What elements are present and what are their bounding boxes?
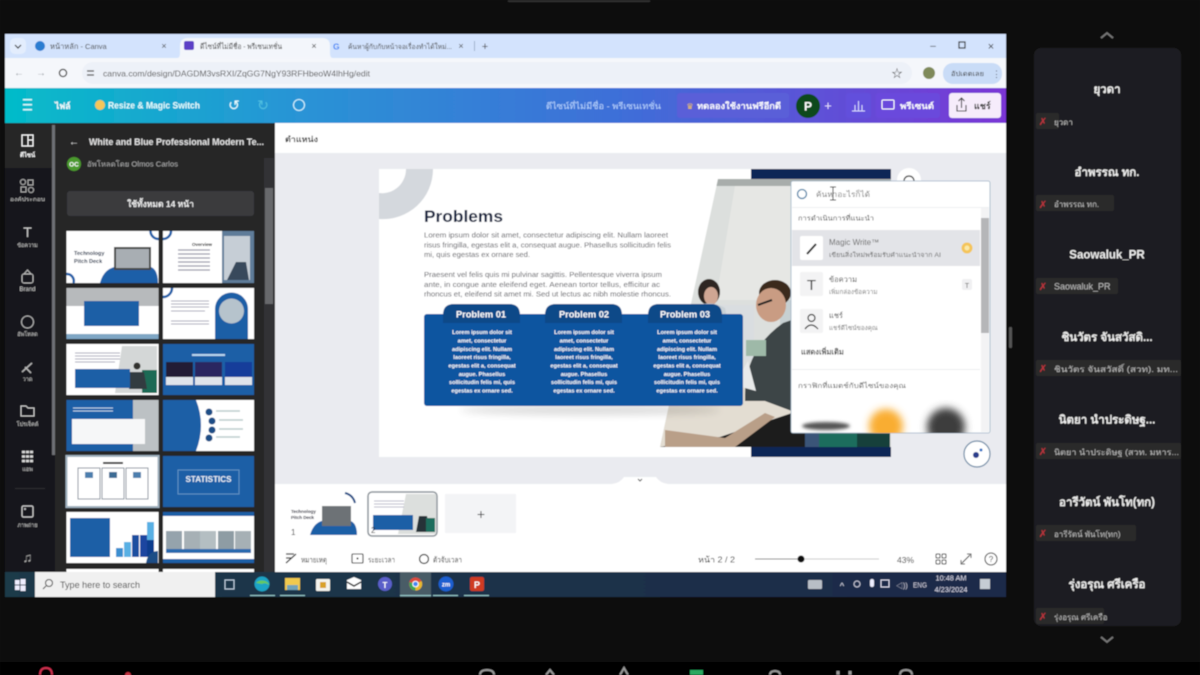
thumb 11 statistics chart (66, 512, 158, 563)
use all pages button: ใช้ทั้งหมด 14 หน้า (127, 197, 194, 209)
author row: อัพโหลดโดย Olmos Carlos (87, 160, 179, 168)
rail item: apps (22, 452, 33, 473)
browser window (5, 34, 1006, 597)
rail item: text: T (23, 224, 32, 240)
view controls (936, 553, 997, 565)
participant 7 (1036, 578, 1146, 624)
page filmstrip (275, 484, 1006, 548)
problem 02 (545, 304, 622, 394)
canva header bar: ดีไซน์ที่ไม่มีชื่อ - พรีเซนเทชั่น (546, 100, 661, 111)
thumb 1 technology pitch deck (66, 231, 158, 283)
rail item: design (20, 135, 36, 159)
rail item: elements: องค์ประกอบ (10, 196, 45, 203)
problem 02: sollicitudin felis mi, quis (551, 380, 617, 386)
blue problems card (424, 304, 743, 406)
woman in background (698, 279, 720, 305)
timer (420, 554, 462, 564)
rail item: music: ♫ (23, 550, 32, 565)
participant list up chevron (1101, 33, 1113, 38)
participant 2: ✗ (1039, 200, 1047, 211)
row: magic write: Magic Write™ (829, 238, 879, 247)
section label: suggested: การดำเนินการที่แนะนำ (798, 214, 874, 222)
body paragraphs: mi, quis egestas ex ornare sed. (424, 250, 530, 259)
browser tab strip: + (482, 41, 488, 53)
rail item: brand (19, 270, 36, 293)
taskbar app icons: T (383, 581, 388, 590)
browser address bar: canva.com/design/DAGDM3vsRXI/ZqGG7NgY93RFHbeoW4lhHg/edit (103, 68, 371, 78)
rail item: uploads (17, 316, 38, 338)
canvas toolbar (275, 123, 1006, 153)
search field: ค้นหาอะไรก็ได้ (816, 189, 870, 199)
rail item: photos: ภาพถ่าย (18, 523, 37, 529)
body paragraphs: Praesent vel felis quis mi pulvinar sagittis. Pellentesque viverra ipsum (424, 270, 662, 279)
canva header bar: + (824, 98, 832, 113)
problem 03: Problem 03 (660, 310, 710, 320)
refresh button behind popup (897, 168, 921, 192)
browser tab strip: × (988, 41, 994, 53)
thumb 3 introduction (66, 288, 158, 339)
participant list down chevron (1101, 637, 1113, 642)
problem 03: augue. Phasellus (664, 372, 710, 378)
notes (286, 554, 327, 564)
participant 1 (1036, 84, 1121, 129)
participant 7: ✗ (1039, 612, 1047, 623)
canvas toolbar: ตำแหน่ง (285, 135, 318, 144)
magic assistant button (964, 441, 990, 467)
body paragraphs: Lorem ipsum dolor sit amet, consectetur adipiscing elit. Nullam laoreet (424, 230, 669, 240)
problem 02: amet, consectetur (560, 338, 609, 344)
taskbar app icons: zm (442, 582, 450, 588)
participant 7: รุ่งอรุณ ศรีเครือ (1069, 578, 1146, 592)
duration (352, 554, 395, 564)
author row: OC (69, 162, 79, 168)
problem 01: augue. Phasellus (459, 372, 505, 378)
rail item: elements (10, 179, 45, 203)
problem 03: egestas ex ornare sed. (656, 388, 718, 394)
notification icon (980, 579, 990, 589)
heading: Problems (424, 207, 503, 226)
panel scrollbar (264, 158, 274, 572)
browser address bar: ⋮ (992, 69, 1001, 79)
top window notch (508, 0, 650, 2)
thumb 12 our team (163, 512, 254, 563)
participant 1: ยุวดา (1093, 84, 1121, 97)
clock (934, 576, 968, 594)
page counter: หน้า 2 / 2 (698, 556, 736, 564)
participant 6: อารีรัตน์ พันโท(ทก) (1054, 529, 1121, 539)
thumb 10 statistics (163, 456, 254, 507)
row: text: T (965, 283, 970, 290)
participant 6 (1036, 494, 1155, 541)
search box: Type here to search (60, 580, 140, 591)
bottom status bar (275, 548, 1006, 572)
canva header bar: ↺ (228, 97, 240, 113)
canva header bar: ♛ (686, 102, 694, 111)
row: share (800, 309, 878, 333)
template thumbnails (66, 231, 254, 574)
canva header bar: ทดลองใช้งานฟรีอีกดี (697, 101, 782, 111)
clock: 4/23/2024 (934, 587, 968, 594)
participant panel (1034, 48, 1181, 626)
add page button (445, 494, 516, 533)
rail item: design: ดีไซน์ (20, 151, 36, 159)
page thumb 1: Technology (291, 509, 316, 514)
participant 6: ✗ (1039, 529, 1047, 540)
problem 01 (443, 304, 520, 394)
problem 02: augue. Phasellus (561, 372, 607, 378)
search box (35, 572, 215, 597)
problem 02: Problem 02 (559, 310, 609, 320)
body paragraphs: risus fringilla, egestas elit a, consequat augue. Phasellus sollicitudin felis (424, 240, 671, 250)
problem 01: amet, consectetur (458, 338, 507, 344)
browser tab strip: หน้าหลัก - Canva (50, 42, 108, 51)
thumb 2 overview: Overview (192, 242, 212, 247)
problem 01: adipiscing elit. Nullam (452, 347, 512, 353)
participant 5: นิตยา นำประดิษฐ... (1059, 412, 1155, 428)
participant 1: ✗ (1039, 117, 1047, 128)
problem 03: amet, consectetur (663, 338, 712, 344)
participant 4: ✗ (1039, 364, 1047, 375)
rail item: apps: แอพ (22, 467, 33, 473)
problem 03: egestas elit a, consequat (653, 364, 721, 370)
page thumb 1 (287, 493, 357, 537)
slide page (379, 169, 751, 457)
problem 03: sollicitudin felis mi, quis (654, 380, 720, 386)
thumb 1 technology pitch deck: Pitch Deck (74, 259, 103, 265)
rail item: draw: วาด (23, 377, 33, 383)
browser address bar (5, 58, 1006, 88)
template side panel: White and Blue Professional Modern Te... (89, 137, 264, 147)
page thumb 1: 1 (291, 528, 296, 537)
popup scrollbar (981, 208, 989, 432)
thumb 10 statistics: STATISTICS (186, 475, 232, 484)
problem 03: adipiscing elit. Nullam (657, 347, 717, 353)
rail item: projects: โปรเจ็คต์ (17, 420, 39, 428)
browser address bar: อัปเดตเลย (951, 70, 984, 78)
canva header bar: แชร์ (974, 100, 991, 111)
canva header bar: ↻ (257, 97, 269, 113)
browser tab strip: × (161, 41, 167, 51)
notes: หมายเหตุ (301, 556, 327, 564)
canva header bar: ไฟล์ (54, 101, 71, 111)
thumb 4 about us (163, 288, 254, 339)
participant 3: Saowaluk_PR (1054, 282, 1111, 292)
browser address bar: → (36, 68, 46, 79)
rail item: text (17, 224, 38, 249)
thumb row cut off (66, 569, 254, 574)
row: share: แชร์ (829, 311, 843, 320)
man at laptop (759, 280, 791, 306)
browser tab strip: × (458, 41, 464, 51)
participant 4: ชินวัตร จันสวัสดิ์ (สวท). มท... (1054, 363, 1178, 374)
body paragraphs: ante, in congue ante eleifend eget. Aenean tortor tellus, efficitur ac (424, 280, 660, 289)
thumb 2 overview (163, 231, 254, 283)
browser tab strip (5, 34, 1006, 58)
participant 7: รุ่งอรุณ ศรีเครือ (1054, 613, 1108, 622)
search popup (791, 181, 990, 446)
panel collapse handle (275, 315, 283, 367)
problem 01: Problem 01 (456, 310, 506, 320)
participant 5: ✗ (1039, 447, 1047, 458)
view controls: ? (989, 555, 994, 564)
browser tab strip: ดีไซน์ที่ไม่มีชื่อ - พรีเซนเทชั่น (200, 41, 282, 51)
participant 2: อำพรรณ ทก. (1075, 165, 1139, 179)
thumb 9 our services selected (66, 456, 158, 507)
problem 02: laoreet risus fringilla, (555, 355, 613, 361)
workspace collapse notch (612, 477, 668, 484)
problem 01: egestas ex ornare sed. (451, 388, 513, 394)
window resize handle (1009, 327, 1012, 348)
thumb 5 problems (66, 344, 158, 395)
problem 01: egestas elit a, consequat (448, 364, 516, 370)
problem 02: adipiscing elit. Nullam (554, 347, 614, 353)
thumb 1 technology pitch deck: Technology (74, 251, 105, 257)
problem 01: Lorem ipsum dolor sit (452, 330, 512, 336)
timer: ตัวจับเวลา (433, 556, 462, 564)
use all pages button (67, 191, 254, 216)
row: text: T (807, 277, 816, 294)
rail item: uploads: อัพโหลด (17, 330, 38, 338)
browser tab strip: × (311, 41, 317, 51)
participant 3: Saowaluk_PR (1069, 250, 1145, 262)
slide navy backdrop (751, 169, 891, 457)
problem 03: laoreet risus fringilla, (658, 355, 716, 361)
photo: office meeting (655, 179, 895, 447)
taskbar app icons: P (474, 580, 480, 590)
rail scrollbar (52, 125, 55, 455)
page thumb 2 selected (368, 492, 437, 536)
thumb 6 concept in business (163, 344, 254, 395)
participant 5: นิตยา นำประดิษฐ (สวท. มหาร... (1054, 448, 1179, 457)
participant 1: ยุวดา (1054, 118, 1073, 127)
panel heading: ← (69, 137, 79, 148)
windows taskbar (5, 572, 1006, 597)
participant 3: ✗ (1039, 282, 1047, 293)
row: share: แชร์ดีไซน์ของคุณ (829, 324, 878, 332)
author row (67, 157, 179, 171)
clock: 10:48 AM (936, 576, 967, 582)
browser tab strip: – (930, 41, 936, 52)
canva header bar: พรีเซนต์ (900, 101, 935, 111)
left icon rail (5, 123, 55, 572)
show more: แสดงเพิ่มเติม (801, 346, 844, 356)
page thumb 2 selected: 2 (371, 526, 376, 535)
participant 4: ชินวัตร จันสวัสดิ... (1061, 331, 1153, 344)
rail item: projects (17, 406, 39, 428)
add page button: + (477, 506, 485, 522)
active tab (177, 38, 333, 58)
problem 03: Lorem ipsum dolor sit (657, 330, 717, 336)
browser tab strip: ค้นหาผู้กับกับหน้าจอเรื่องทำได้ใหม่... (348, 42, 452, 51)
rail item: text: ข้อความ (17, 242, 38, 249)
decorative ring (379, 169, 433, 219)
workspace (275, 153, 1006, 484)
row: magic write: เขียนสิ่งใหม่พร้อมรับคำแนะนำจาก AI (829, 250, 941, 259)
row: text (800, 272, 972, 296)
rail item: draw (22, 363, 33, 383)
problem 01: laoreet risus fringilla, (453, 355, 511, 361)
slide: problems (379, 169, 895, 457)
template side panel (55, 123, 283, 574)
participant 6: อารีวัตน์ พันโท(ทก) (1059, 494, 1155, 509)
zoom percent: 43% (897, 555, 914, 565)
system tray (808, 579, 927, 591)
system tray: ◁)) (896, 582, 908, 590)
canva header bar: Resize & Magic Switch (108, 100, 200, 110)
row: text: ข้อความ (829, 275, 857, 284)
search field (792, 187, 989, 208)
participant 2: อำพรรณ ทก. (1054, 200, 1099, 209)
page thumb 1: Pitch Deck (291, 515, 315, 520)
zoom slider (755, 556, 879, 562)
graphic previews (800, 402, 972, 434)
body paragraphs: rhoncus et, eleifend sit amet mi. Sed ut lectus ac nibh molestie rhoncus. (424, 290, 671, 298)
participant 5 (1036, 412, 1181, 459)
participant 2 (1036, 165, 1139, 211)
system tray: ENG (913, 582, 927, 590)
participant 4 (1036, 331, 1181, 376)
problem 02: egestas elit a, consequat (550, 364, 618, 370)
browser tab strip: G (333, 42, 340, 52)
rail item: photos (18, 506, 37, 529)
system tray: ^ (840, 581, 845, 591)
section label: graphics: กราฟิกที่แมตช์กับดีไซน์ของคุณ (798, 381, 907, 390)
start button (15, 579, 26, 591)
rail item: brand: Brand (19, 287, 36, 293)
row: text: เพิ่มกล่องข้อความ (829, 287, 878, 296)
problem 02: Lorem ipsum dolor sit (554, 330, 614, 336)
row: magic write (792, 230, 980, 266)
body paragraphs (424, 230, 671, 298)
thumb 7 objectives (66, 400, 158, 451)
duration: ระยะเวลา (368, 556, 395, 564)
zoom toolbar strip (0, 662, 1200, 675)
canva header bar (5, 88, 1006, 123)
canva header bar: P (804, 100, 812, 114)
problem 03 (648, 304, 722, 394)
browser address bar: ☆ (892, 67, 902, 80)
taskbar app icons (225, 572, 489, 597)
card shadow (460, 405, 720, 415)
problem 02: egestas ex ornare sed. (553, 388, 615, 394)
problem 01: sollicitudin felis mi, quis (449, 380, 515, 386)
participant 3 (1036, 250, 1145, 294)
browser address bar: ← (14, 68, 24, 79)
thumb 8 marketing strategy (163, 400, 254, 451)
